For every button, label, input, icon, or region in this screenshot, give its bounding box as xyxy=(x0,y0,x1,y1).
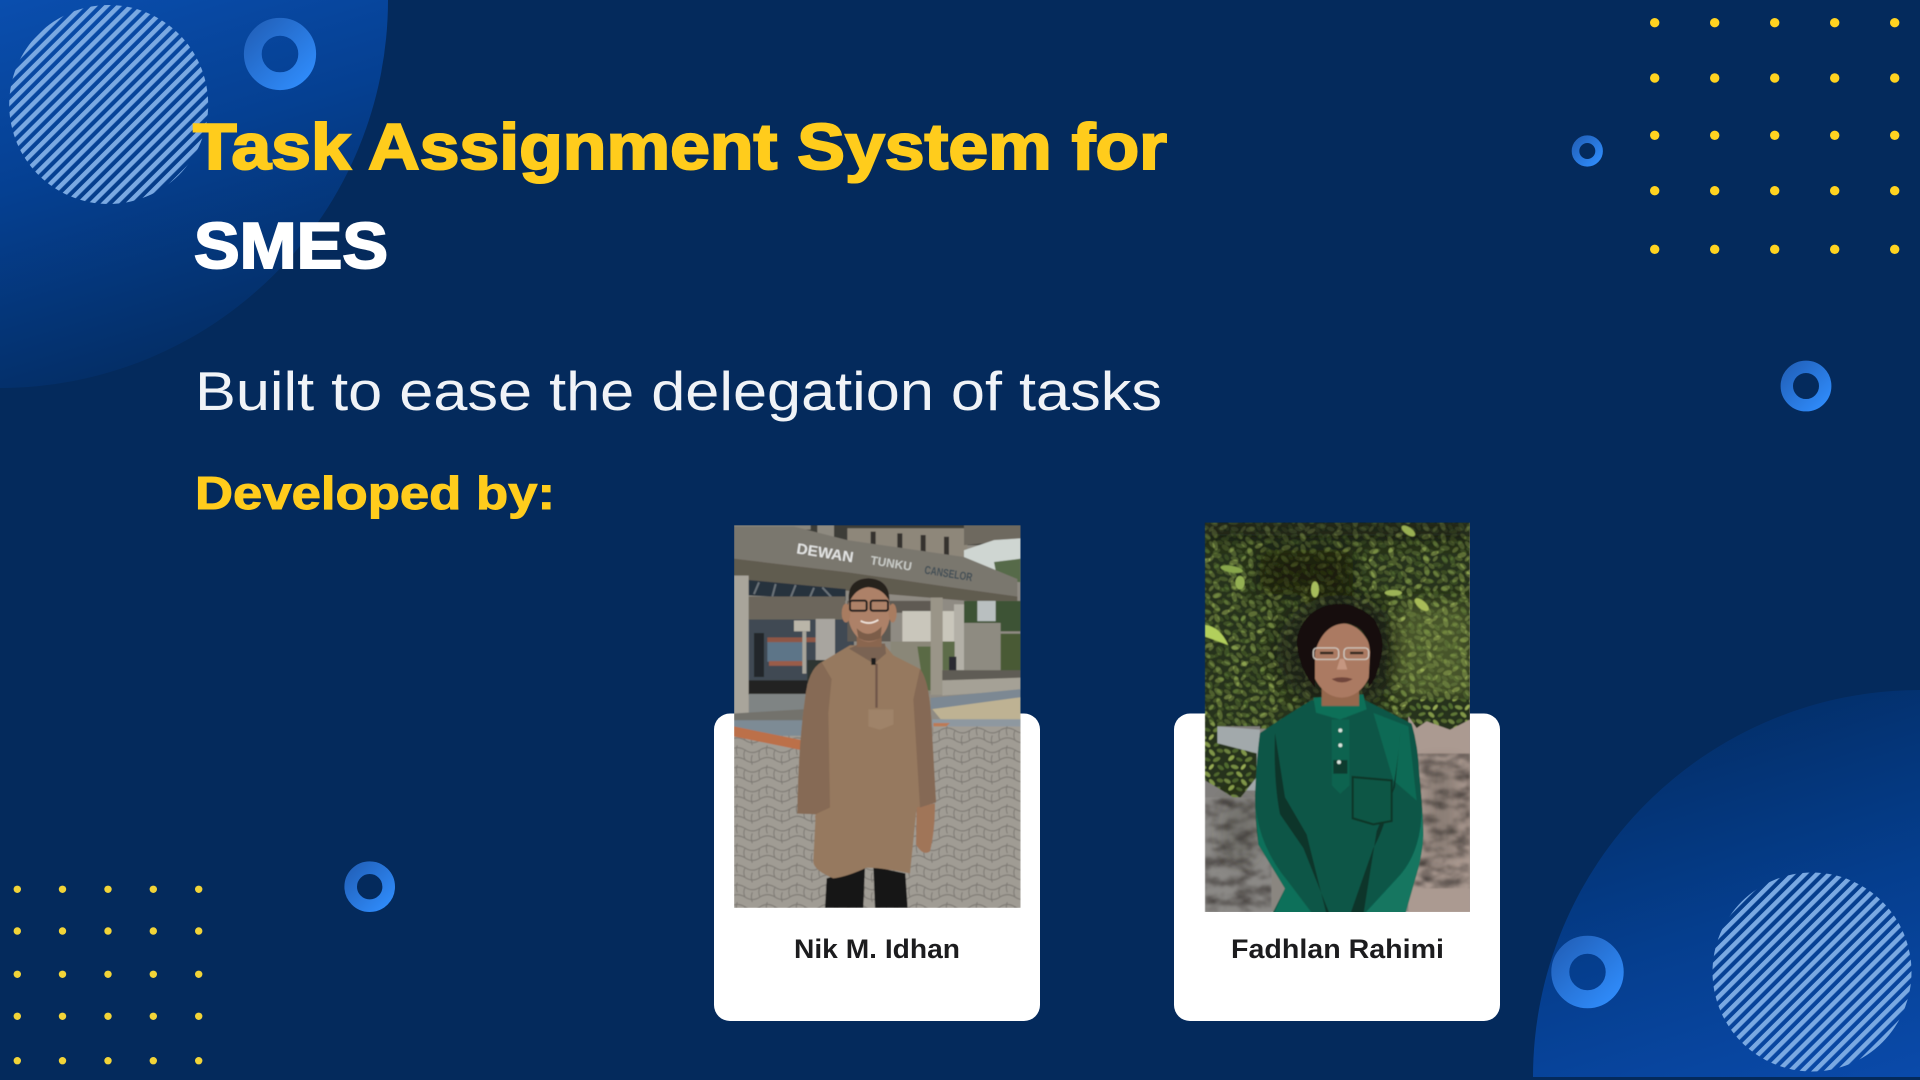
photo: man in brown kurta in front of a building: TUNKU xyxy=(870,553,913,574)
decorative quarter circle bottom-right xyxy=(1533,690,1920,1077)
photo: man in brown kurta in front of a building: DEWAN xyxy=(795,541,854,566)
title line 1: Task Assignment System for xyxy=(193,110,1167,183)
photo: man in brown kurta in front of a building: CANSELOR xyxy=(924,565,973,584)
ring right xyxy=(1787,367,1825,405)
profile card: Nik M. Idhan xyxy=(714,525,1040,1021)
dot grid bottom-left xyxy=(14,886,202,1064)
ring top-left xyxy=(253,27,307,81)
hatched circle bottom-right xyxy=(1712,872,1912,1072)
hatched circle top-left xyxy=(9,5,208,204)
card background xyxy=(714,714,1040,1021)
card background xyxy=(1174,714,1500,1021)
developed by heading: Developed by: xyxy=(195,467,555,519)
dot grid top-right xyxy=(1650,18,1899,254)
photo: man in green shirt in front of a leafy wall xyxy=(1205,523,1470,915)
photo: man in brown kurta in front of a building xyxy=(734,525,1021,908)
name: Fadhlan Rahimi xyxy=(1231,934,1444,964)
small ring top-right xyxy=(1576,139,1599,163)
profile card: Fadhlan Rahimi xyxy=(1174,523,1500,1021)
title line 2: SMES xyxy=(194,209,388,282)
ring bottom-right xyxy=(1560,945,1615,999)
ring bottom-left xyxy=(351,868,389,906)
decorative quarter circle top-left xyxy=(0,0,388,388)
subtitle: Built to ease the delegation of tasks xyxy=(195,360,1162,422)
name: Nik M. Idhan xyxy=(794,934,960,964)
